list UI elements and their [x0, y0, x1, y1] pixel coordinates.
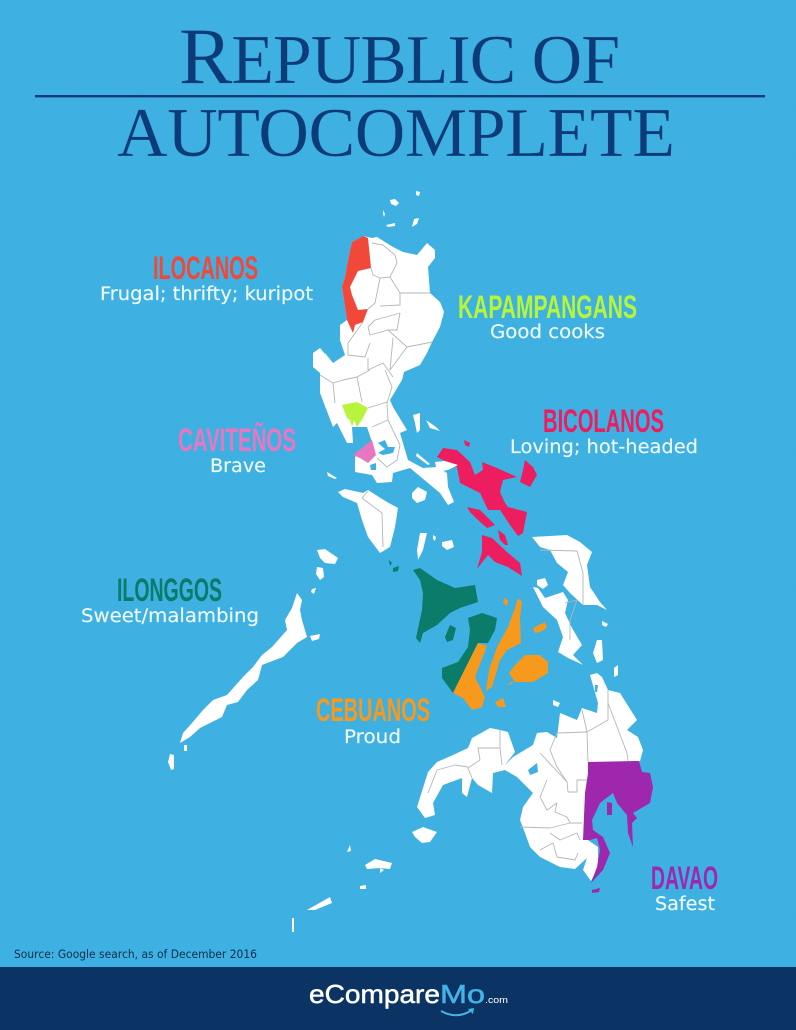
- label: Cebuanos: Proud: [344, 727, 401, 748]
- source note: Source: Google search, as of December 2016: [14, 947, 257, 961]
- label: Ilonggos: Sweet/malambing: [81, 606, 259, 627]
- label: Ilocanos: ILOCANOS: [153, 250, 258, 286]
- title: [117, 13, 675, 172]
- label: Cebuanos: [316, 692, 430, 748]
- label: Kapampangans: Good cooks: [490, 322, 605, 343]
- label: Caviteños: CAVITEÑOS: [178, 422, 296, 458]
- label: Ilocanos: Frugal; thrifty; kuripot: [100, 284, 313, 305]
- label: Ilocanos: [100, 250, 313, 305]
- label: Bicolanos: [510, 403, 698, 458]
- label: Cebuanos: CEBUANOS: [316, 692, 430, 728]
- Samar: [532, 535, 607, 610]
- Palawan satellites: [168, 549, 338, 770]
- label: Bicolanos: BICOLANOS: [543, 403, 664, 439]
- label: Bicolanos: Loving; hot-headed: [510, 437, 698, 458]
- map of the Philippines: [168, 191, 653, 932]
- Mindanao: [417, 673, 643, 881]
- footer bar: [0, 967, 796, 1030]
- eCompareMo logo: .com: [485, 995, 508, 1005]
- Davao region: [583, 761, 653, 893]
- eCompareMo logo: Mo: [440, 979, 485, 1009]
- label: Davao: [651, 860, 718, 915]
- provincial borders: [320, 243, 628, 860]
- label: Caviteños: [178, 422, 296, 477]
- Cebu, Bohol, Negros Oriental: Cebuanos: [453, 598, 548, 710]
- label: Caviteños: Brave: [210, 456, 266, 477]
- label: Ilonggos: ILONGGOS: [117, 572, 222, 608]
- Pampanga: Kapampangans: [342, 402, 368, 427]
- lakes and bays: [321, 349, 598, 775]
- Cavite: Caviteños: [353, 440, 376, 463]
- Leyte: [533, 587, 583, 665]
- label: Davao: Safest: [655, 894, 715, 915]
- eCompareMo logo: eCompare: [309, 979, 440, 1009]
- Ilocos region: Ilocanos: [342, 236, 371, 333]
- label: Kapampangans: [458, 289, 637, 343]
- label: Ilonggos: [81, 572, 259, 627]
- Panay and Negros Occidental: Ilonggos: [389, 560, 497, 693]
- Biliran, Dinagat and eastern islets: [537, 578, 618, 677]
- title line 2: AUTOCOMPLETE: [117, 95, 675, 172]
- title line 1: REPUBLIC OF: [179, 13, 620, 101]
- label: Kapampangans: KAPAMPANGANS: [458, 289, 637, 325]
- Bicol region: Bicolanos: [437, 440, 537, 576]
- Basilan, Sulu and Camiguin: [292, 700, 560, 932]
- eCompareMo logo: [309, 979, 508, 1015]
- label: Davao: DAVAO: [651, 860, 718, 896]
- Batanes and northern islands: [383, 191, 420, 227]
- Palawan: [180, 593, 307, 743]
- Mindoro: [338, 489, 398, 553]
- Visayas and minor Luzon islands: [327, 413, 454, 560]
- Bicol white tip: [435, 461, 458, 472]
- Luzon: [313, 236, 454, 505]
